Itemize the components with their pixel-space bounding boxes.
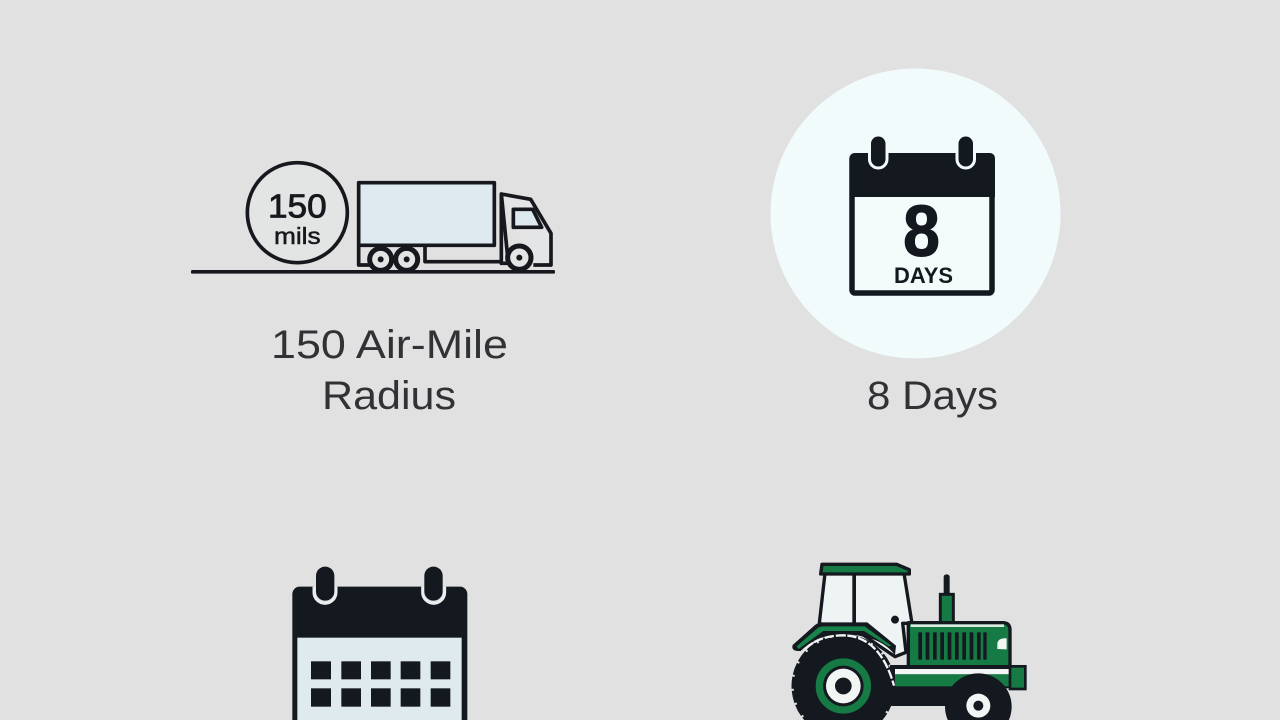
rear wheel [793,636,893,720]
panel: 8 days [770,68,1060,418]
calendar page [297,638,462,720]
miles badge: 150 [268,189,327,226]
label: 150 Air-Mile: 150 Air-Mile [271,323,508,367]
cab [501,194,551,265]
calendar body [292,587,467,720]
road line [191,270,555,274]
chassis [887,665,1025,706]
cab [819,573,912,657]
rear wheels [370,248,392,270]
panel: 150 air-mile radius [191,163,555,418]
chassis [359,245,508,265]
panel: tractor [792,564,1025,720]
exhaust stack [940,574,953,623]
front wheel [945,673,1012,720]
miles badge: mils [274,223,321,249]
headlight [997,638,1007,649]
cab window [513,209,542,227]
DAYS caption: DAYS [894,263,953,288]
front wheel [508,246,531,269]
binding rings [870,135,974,168]
highlight circle [770,68,1060,358]
calendar day squares [311,661,450,707]
icon: calendar with 8 days [850,135,995,293]
fender [792,622,896,686]
grille [918,632,987,660]
hood [908,623,1010,667]
binding rings [314,567,445,603]
calendar header [850,153,995,197]
roof [821,564,909,574]
label: Radius: Radius [322,374,456,418]
number 8: 8 [903,192,940,272]
calendar body [852,156,992,293]
miles badge [247,163,347,263]
cargo box [359,183,494,245]
icon: truck with 150 miles badge [191,163,555,274]
label: 8 Days: 8 Days [867,374,998,418]
truck [359,183,551,270]
panel: calendar [292,567,467,720]
